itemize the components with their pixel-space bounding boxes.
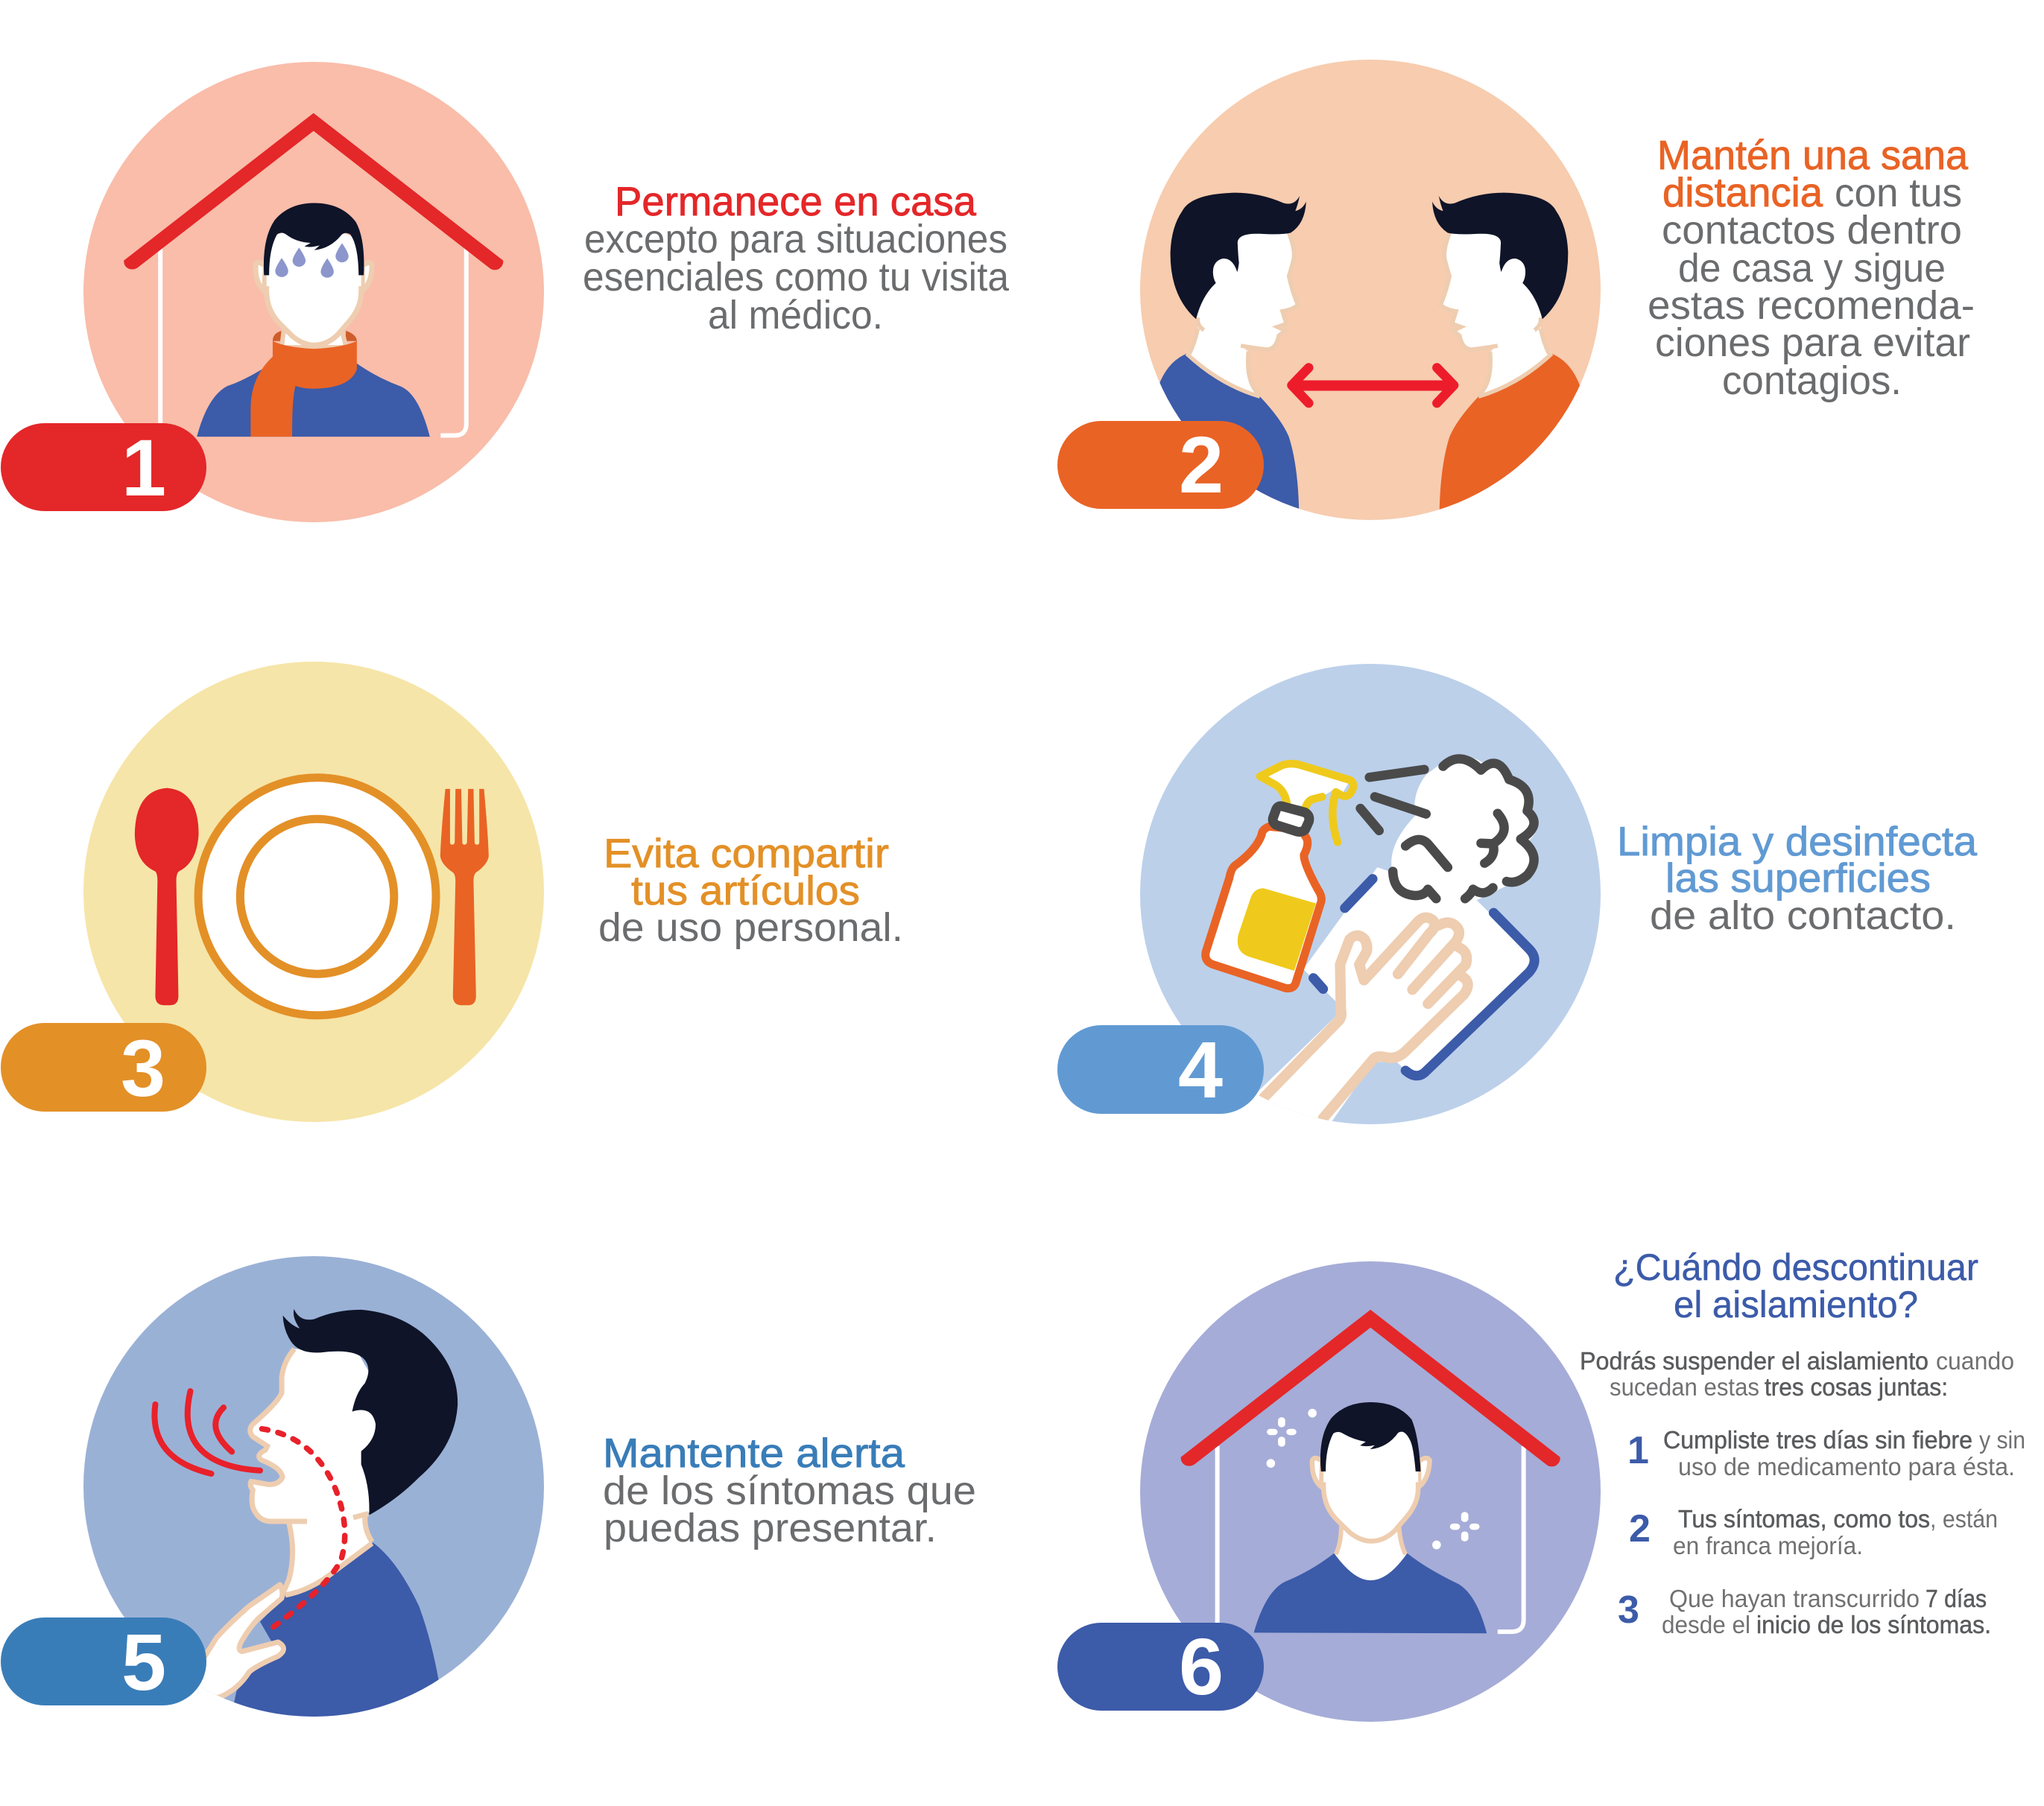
head and neck — [250, 1349, 379, 1594]
list item 1: y sin — [1979, 1426, 2025, 1454]
face outline — [1323, 1482, 1418, 1541]
house walls — [1218, 1446, 1524, 1632]
text: healthy distance: contactos dentro — [1662, 208, 1962, 253]
scarf — [250, 341, 357, 437]
left man — [1159, 192, 1306, 509]
hair — [283, 1309, 458, 1515]
text: clean and disinfect: las superficies — [1665, 855, 1931, 901]
right hair — [1432, 193, 1568, 319]
text: healthy distance: estas recomenda- — [1648, 283, 1975, 328]
panel 6: when to stop isolation — [1057, 1246, 2025, 1722]
left shirt — [1159, 353, 1300, 509]
badge 1: 1 — [121, 422, 166, 513]
text: stay home: Permanece en casa — [615, 178, 976, 224]
left hair — [1171, 193, 1306, 319]
heading: when to discontinue: ¿Cuándo descontinuar — [1613, 1246, 1978, 1288]
skin outline — [250, 1349, 372, 1595]
badge 6 — [1057, 1621, 1264, 1711]
neck — [1335, 1527, 1406, 1580]
text: do not share — [598, 830, 903, 950]
icon: spray bottle and hand wiping — [1206, 756, 1538, 1126]
text: stay home: al médico. — [708, 293, 883, 338]
text: intro: sucedan estas — [1610, 1373, 1759, 1401]
house walls — [160, 249, 466, 435]
airway dashed line — [262, 1429, 345, 1632]
arrow: double headed distance — [1291, 368, 1454, 403]
shirt — [1254, 1553, 1487, 1633]
list item 2: Tus síntomas, como tos — [1678, 1505, 1930, 1533]
badge 5 — [1, 1617, 206, 1707]
list item 2 — [1629, 1505, 1998, 1559]
text: healthy distance: distancia — [1662, 169, 1823, 215]
scarf back — [273, 331, 357, 346]
text: healthy distance: Mantén una sana — [1657, 132, 1968, 178]
badge 3: 3 — [121, 1023, 165, 1113]
heading: when to discontinue — [1613, 1246, 1978, 1325]
badge 3 — [1, 1023, 206, 1113]
list item 2: 2 — [1629, 1507, 1651, 1550]
list item 3: 7 días — [1926, 1585, 1987, 1612]
hand outline — [1264, 917, 1468, 1118]
right man — [1432, 192, 1580, 510]
text: watch for symptoms: puedas presentar. — [604, 1506, 937, 1550]
text: clean and disinfect — [1617, 818, 1977, 938]
ears — [1312, 1458, 1430, 1487]
shirt — [234, 1543, 439, 1722]
list item 1: Cumpliste tres días sin fiebre — [1663, 1426, 1972, 1454]
list item 1: uso de medicamento para ésta. — [1678, 1453, 2015, 1480]
panel 1: stay home — [1, 62, 1010, 522]
face — [267, 229, 361, 345]
right face — [1440, 233, 1551, 396]
panel 2: healthy distance — [1057, 60, 1975, 534]
sparkles — [1267, 1409, 1480, 1549]
neck — [282, 332, 346, 347]
plate — [198, 778, 436, 1016]
surface edge — [1314, 879, 1534, 1076]
spray head — [1260, 764, 1353, 842]
breath waves — [154, 1391, 260, 1474]
bottle — [1206, 826, 1321, 989]
text: healthy distance: con tus — [1835, 171, 1962, 215]
text: watch for symptoms — [603, 1430, 976, 1550]
list item 1: 1 — [1627, 1429, 1649, 1472]
fork — [440, 789, 489, 1005]
text: healthy distance — [1648, 132, 1975, 403]
ears — [256, 263, 372, 291]
badge 4 — [1057, 1024, 1264, 1115]
list item 3: 3 — [1618, 1588, 1639, 1632]
left face outline — [1186, 233, 1298, 396]
house roof — [1181, 1310, 1560, 1466]
icon: two men keeping distance — [1145, 193, 1594, 534]
badge 4: 4 — [1178, 1024, 1223, 1115]
cleaning foam cloud — [1391, 756, 1538, 900]
circle background 1 — [83, 62, 544, 522]
badge 6: 6 — [1179, 1621, 1224, 1711]
panel 3: do not share items — [1, 662, 903, 1122]
panel 4: clean and disinfect — [1057, 664, 1977, 1126]
spoon — [135, 788, 199, 1005]
text: clean and disinfect: de alto contacto. — [1650, 893, 1956, 938]
hand fill — [1256, 1012, 1388, 1121]
bottle liquid — [1238, 888, 1316, 971]
icon: healthy man in house — [1181, 1310, 1560, 1633]
circle background 6 — [1140, 1261, 1601, 1722]
right shirt — [1440, 353, 1580, 510]
text: healthy distance: de casa y sigue — [1678, 246, 1946, 291]
heading: when to discontinue: el aislamiento? — [1674, 1284, 1918, 1325]
circle background 5 — [83, 1256, 544, 1717]
text: stay home: esenciales como tu visita — [583, 255, 1010, 300]
badge 2 — [1057, 419, 1264, 510]
face outline — [267, 286, 361, 345]
text: stay home: excepto para situaciones — [584, 217, 1007, 262]
text: intro — [1580, 1347, 2014, 1401]
list item 3: inicio de los síntomas. — [1756, 1611, 1991, 1638]
list item 1 — [1627, 1426, 2025, 1480]
surface — [1303, 867, 1531, 1075]
text: intro: cuando — [1936, 1347, 2014, 1375]
right face outline — [1440, 233, 1551, 396]
text: clean and disinfect: Limpia y desinfecta — [1617, 818, 1977, 864]
foam outline and spray marks — [1361, 759, 1534, 899]
hair — [1320, 1402, 1421, 1471]
text: do not share: de uso personal. — [598, 905, 903, 950]
hair — [264, 203, 364, 275]
icon: man breathing with airway — [154, 1309, 458, 1722]
list item 3: Que hayan transcurrido — [1669, 1585, 1920, 1612]
bottle cap — [1273, 806, 1309, 831]
list item 2: , están — [1930, 1505, 1998, 1533]
icon: sick man in house — [124, 113, 503, 437]
house roof — [124, 113, 503, 270]
text: stay home — [583, 178, 1010, 338]
text: healthy distance: ciones para evitar — [1655, 320, 1970, 365]
circle background 2 — [1140, 60, 1601, 520]
text: do not share: Evita compartir — [604, 830, 889, 876]
shirt — [197, 361, 430, 437]
badge 1 — [1, 422, 206, 513]
list item 3 — [1618, 1585, 1991, 1638]
hand at neck — [195, 1585, 283, 1700]
circle background 4 — [1140, 664, 1601, 1124]
panel 5: watch for symptoms — [1, 1256, 976, 1722]
text: do not share: tus artículos — [631, 867, 860, 913]
text: intro: Podrás suspender el aislamiento — [1580, 1347, 1928, 1375]
circle background 3 — [83, 662, 544, 1122]
spray head fill — [1268, 767, 1349, 806]
list item 3: desde el — [1662, 1611, 1750, 1638]
text: watch for symptoms: Mantente alerta — [603, 1430, 905, 1476]
text: healthy distance: contagios. — [1722, 358, 1902, 403]
icon: plate, spoon and fork — [135, 778, 489, 1016]
text: intro: tres cosas juntas: — [1765, 1373, 1948, 1401]
left face — [1186, 233, 1298, 396]
text: watch for symptoms: de los síntomas que — [603, 1468, 976, 1513]
sweat drops — [275, 243, 349, 278]
neck outline — [1336, 1526, 1405, 1554]
badge 2: 2 — [1179, 419, 1224, 510]
face — [1323, 1428, 1418, 1541]
list item 2: en franca mejoría. — [1673, 1532, 1863, 1559]
badge 5: 5 — [121, 1617, 166, 1707]
